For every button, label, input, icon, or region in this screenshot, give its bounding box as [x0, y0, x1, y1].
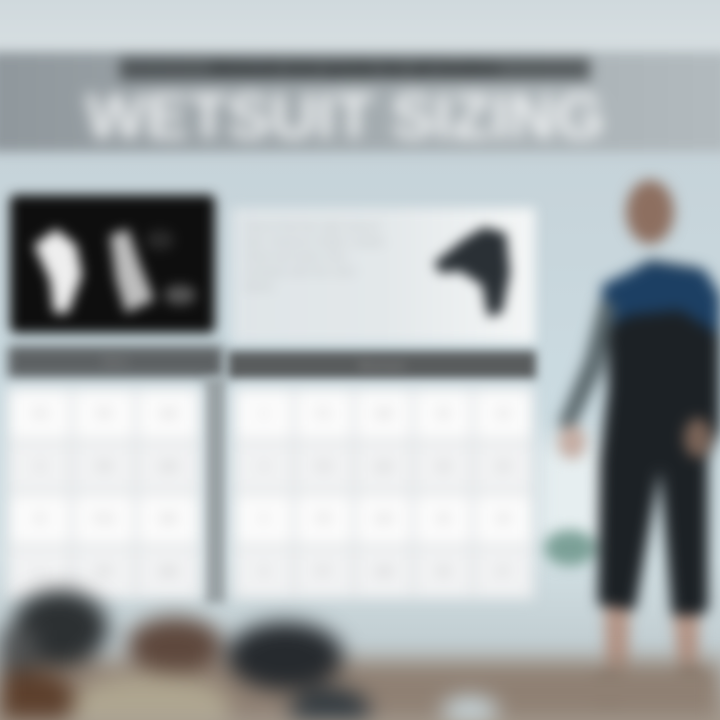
hands	[558, 425, 586, 459]
table: right sizes: 2	[261, 408, 267, 420]
table: right sizes: 5'1	[317, 408, 331, 420]
divider column	[204, 378, 226, 603]
table: left sizes: 130	[159, 408, 177, 420]
table: right sizes: 25	[497, 461, 509, 473]
table: left sizes: 5'8	[97, 461, 111, 473]
table: right sizes: 130	[374, 566, 393, 578]
table: right sizes: 27	[497, 566, 509, 578]
sea highlight	[535, 440, 635, 550]
table: left sizes: 180	[159, 566, 177, 578]
table: right sizes: 5'7	[317, 566, 331, 578]
table: right sizes: 8	[261, 566, 267, 578]
table: left sizes: XS	[33, 408, 47, 420]
table: right sizes: 35	[437, 566, 449, 578]
subtitle	[120, 58, 590, 80]
table: right sizes: 6	[261, 513, 267, 525]
table: left sizes: M	[35, 513, 45, 525]
table: left sizes: 5'6	[97, 408, 111, 420]
table: left sizes: 145	[159, 461, 177, 473]
legs skin	[604, 600, 700, 690]
wave patch	[544, 530, 596, 566]
table: right sizes: 4	[261, 461, 267, 473]
table header: left: Men	[102, 353, 129, 369]
subtitle: Wetsuit size guide for all bodies	[211, 58, 499, 79]
head	[626, 180, 674, 244]
table header: left	[8, 346, 223, 378]
main title: WETSUIT SIZING	[85, 80, 605, 152]
table: left sizes: 5'10	[94, 513, 114, 525]
table: right sizes: 100	[374, 408, 393, 420]
left arm	[558, 300, 616, 432]
table: right sizes: 5'3	[317, 461, 331, 473]
table: right sizes: 26	[497, 513, 509, 525]
foreground: rocks and crowd	[0, 573, 720, 720]
table: right sizes: 110	[375, 461, 392, 473]
icon: wetsuit	[427, 218, 520, 324]
intro text: How to find the right wetsuit size: measure height, weight, chest and waist, then compare with the chart below.	[244, 221, 386, 293]
table: right sizes	[226, 377, 539, 604]
feet	[592, 676, 624, 700]
table: left sizes: L	[37, 566, 43, 578]
table: right sizes: 120	[374, 513, 393, 525]
panel: white intro text with wetsuit icon	[232, 208, 535, 343]
table: right sizes: 32	[437, 408, 449, 420]
table: left sizes: 160	[159, 513, 177, 525]
table: right sizes: 33	[437, 461, 449, 473]
table: right sizes: 34	[437, 513, 449, 525]
table: right sizes: 24	[497, 408, 509, 420]
torso	[598, 260, 720, 615]
icon: body front silhouette	[26, 222, 201, 323]
title band	[0, 52, 720, 152]
panel: black measurement diagram	[10, 195, 215, 333]
shoulder blue	[602, 262, 720, 335]
table header: right	[228, 351, 536, 379]
table: right sizes: 5'5	[317, 513, 331, 525]
table: left sizes: 6'0	[97, 566, 111, 578]
table: left sizes: S	[36, 461, 44, 473]
table header: right: Women	[358, 357, 406, 373]
person in wetsuit	[536, 171, 720, 676]
table: left sizes	[2, 378, 210, 604]
